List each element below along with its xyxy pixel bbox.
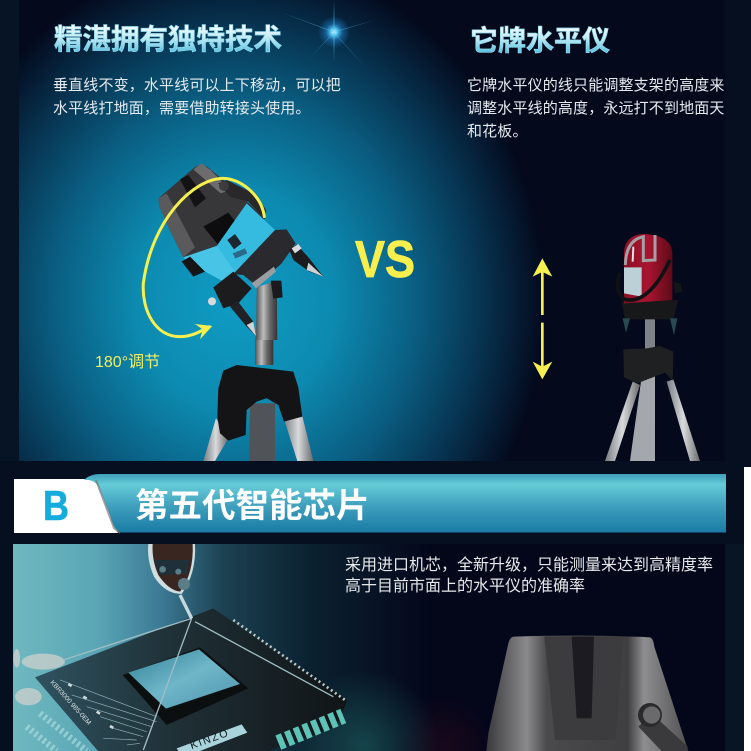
chip board	[35, 608, 347, 751]
text block: chip description: 高于目前市面上的水平仪的准确率	[345, 577, 585, 595]
red body	[624, 234, 672, 303]
arrow: 180 degree rotation	[143, 178, 264, 339]
base with feet	[622, 300, 678, 319]
VS mark: VS	[355, 231, 415, 289]
right leveling foot	[289, 244, 323, 277]
lower leveling foot	[230, 301, 256, 336]
icon: glowing star	[280, 0, 375, 68]
heading: competitor: 它牌水平仪	[470, 25, 610, 56]
center processor	[123, 647, 248, 725]
text block: chip description	[345, 556, 713, 595]
hanging droplet	[148, 544, 195, 594]
chip pins	[233, 620, 345, 700]
lower foot mount	[213, 272, 252, 308]
traces	[60, 680, 157, 745]
wires	[63, 618, 333, 750]
label: 180 degree adjustment: 180°调节	[95, 353, 160, 371]
text block: competitor description: 调整水平线的高度，永远打不到地面天	[467, 100, 725, 117]
panel: chip photo	[13, 544, 744, 751]
product: blue laser level on tripod	[158, 163, 323, 461]
lower left component pins	[27, 713, 87, 751]
black arm	[233, 229, 296, 286]
text block: chip description: 采用进口机芯，全新升级，只能测量来达到高精度率	[345, 556, 713, 574]
letter B: B	[43, 482, 69, 529]
label plate	[624, 267, 642, 297]
KINZO label	[177, 724, 247, 751]
text block: left description	[53, 77, 341, 117]
handle	[617, 260, 670, 300]
blue band	[183, 203, 275, 281]
knob	[182, 257, 205, 277]
section banner	[14, 474, 726, 533]
mounting bracket	[218, 180, 266, 219]
laser head	[158, 163, 323, 308]
pale blurred parts	[13, 649, 65, 705]
banner title: 第五代智能芯片	[135, 488, 370, 525]
heading: left product: 精湛拥有独特技术	[54, 24, 282, 56]
control panel	[227, 234, 247, 259]
text block: competitor description	[467, 76, 725, 140]
grey housing	[158, 165, 265, 257]
pivot knob and arm	[638, 703, 688, 751]
product: red laser level on tripod	[605, 234, 700, 461]
inner panel	[544, 637, 623, 740]
product: grey laser head close-up	[486, 635, 688, 751]
tripod base	[203, 281, 313, 461]
arrows: up and down	[533, 258, 552, 379]
white tab	[14, 479, 118, 533]
ball	[208, 297, 216, 305]
text block: competitor description: 和花板。	[467, 122, 528, 140]
text block: competitor description: 它牌水平仪的线只能调整支架的高度来	[467, 76, 725, 94]
tripod	[605, 318, 700, 461]
slot	[572, 637, 594, 718]
panel: comparison background	[0, 0, 751, 461]
laser housing	[617, 234, 683, 335]
white edge	[744, 467, 751, 751]
pads	[68, 684, 113, 728]
text block: left description: 水平线打地面，需要借助转接头使用。	[53, 100, 311, 117]
marking on chip: KBR3000 985-0EM	[49, 679, 92, 727]
blue bar	[84, 474, 726, 532]
silver trim	[625, 235, 655, 265]
text block: left description: 垂直线不变，水平线可以上下移动，可以把	[53, 77, 341, 94]
